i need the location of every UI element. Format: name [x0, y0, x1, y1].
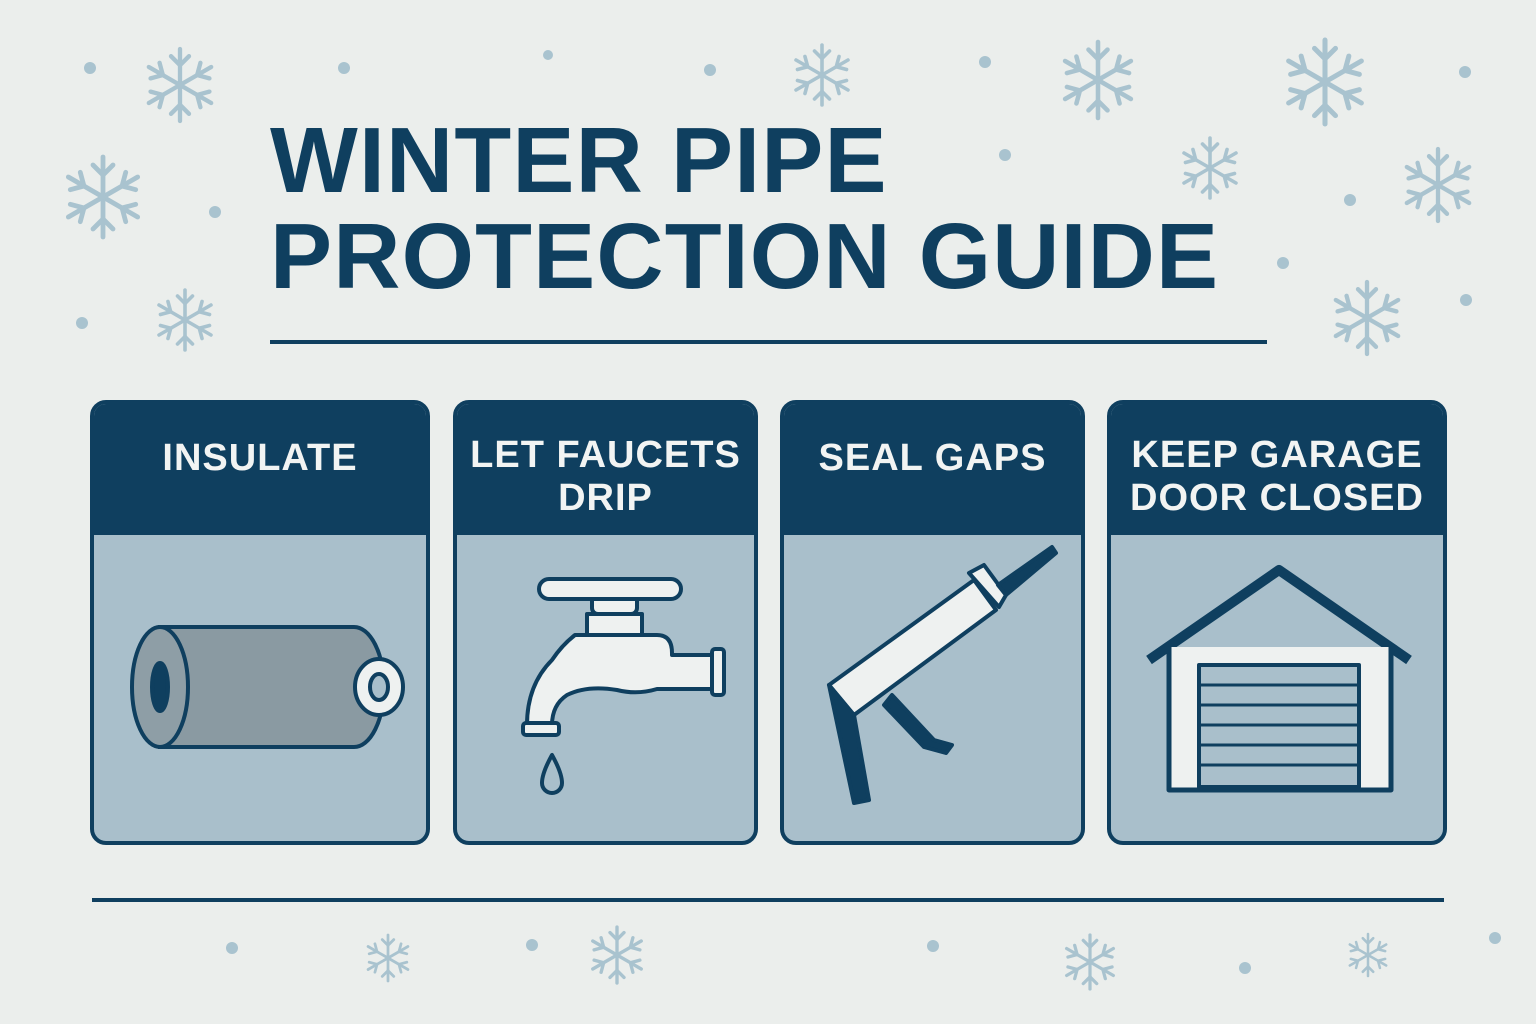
icon: garage — [1146, 564, 1412, 792]
panel: insulate: INSULATE — [162, 437, 358, 479]
panel: garage: KEEP GARAGE — [1131, 434, 1423, 476]
panel: seal gaps — [780, 400, 1085, 845]
icon: faucet — [521, 577, 726, 795]
panel: garage — [1107, 400, 1447, 845]
icon: caulk gun — [826, 544, 1058, 805]
title — [270, 108, 1219, 308]
icon: insulated pipe — [130, 625, 405, 749]
panel: faucets: DRIP — [558, 476, 653, 518]
title: WINTER PIPE — [270, 108, 888, 212]
panel: faucets — [453, 400, 758, 845]
panel: faucets: LET FAUCETS — [470, 434, 741, 476]
title: PROTECTION GUIDE — [270, 204, 1219, 308]
dividers — [270, 340, 1267, 344]
panel: garage: DOOR CLOSED — [1130, 476, 1424, 518]
panel: insulate — [90, 400, 430, 845]
panel: seal gaps: SEAL GAPS — [819, 437, 1046, 479]
